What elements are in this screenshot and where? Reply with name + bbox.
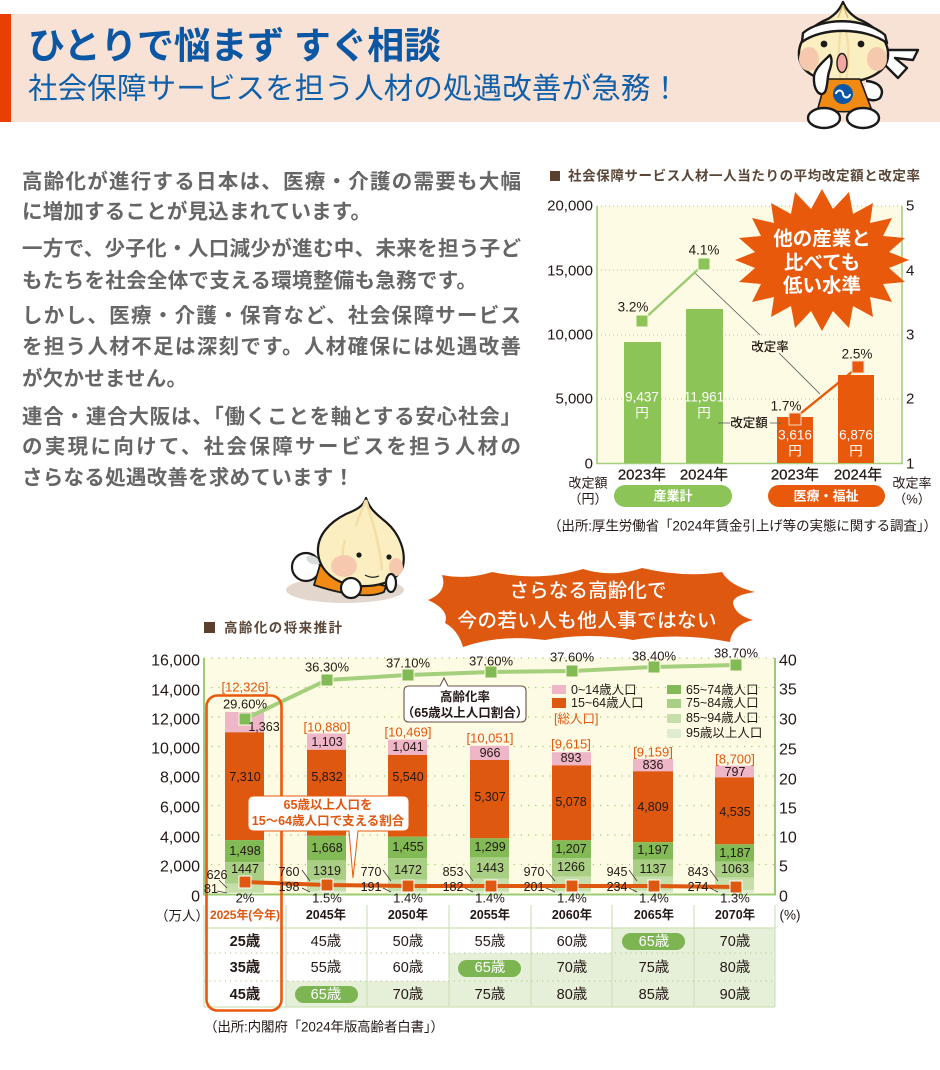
callout: aging is not someone else's problem: さらなる高齢化で [510, 580, 666, 602]
right axis: 35 [779, 682, 797, 698]
left axis: 0 [191, 888, 200, 906]
data labels: 274 [688, 880, 708, 894]
table cells: 45歳 [311, 933, 341, 950]
table cells: 60歳 [393, 959, 423, 976]
aging rate labels [223, 646, 758, 712]
text block: intro paragraphs: に増加することが見込まれています。 [22, 200, 371, 224]
totals: [9,159] [633, 744, 673, 760]
table cells: 80歳 [557, 986, 587, 1003]
aging rate labels: 37.10% [386, 656, 430, 670]
bar: 2065 [633, 759, 673, 894]
support ratio labels: 1.4% [475, 890, 505, 906]
support ratio labels: 1.4% [557, 890, 587, 906]
category pill: industry total: 産業計 [653, 488, 693, 504]
left axis labels [547, 198, 593, 472]
left axis: 2,000 [160, 858, 200, 876]
data labels: 1,187 [719, 846, 751, 860]
data labels: 760 [279, 865, 299, 879]
table cells: 85歳 [639, 986, 669, 1003]
data labels: 843 [688, 865, 708, 879]
legend: 95歳以上人口 [686, 726, 762, 740]
value labels: 円 [788, 444, 802, 458]
callout: aging rate: 高齢化率 [440, 689, 490, 704]
data labels: 1137 [640, 862, 666, 876]
legend: 65~74歳人口 [686, 683, 759, 697]
data labels: 1447 [231, 862, 259, 876]
totals: [10,880] [304, 720, 350, 734]
left axis labels: 20,000 [547, 198, 593, 214]
right axis labels [906, 198, 914, 472]
data labels: 5,832 [311, 770, 343, 784]
line: support ratio [239, 876, 742, 893]
category pill: medical and welfare [768, 485, 885, 507]
table cells: 75歳 [475, 986, 505, 1003]
table cells: 25歳 [230, 933, 261, 950]
data labels: 198 [279, 880, 299, 894]
data labels: 5,078 [555, 795, 587, 809]
data labels: 5,307 [474, 790, 506, 804]
table header: 2050年 [388, 907, 428, 922]
callout: aging is not someone else's problem [428, 568, 755, 647]
data labels: 191 [361, 880, 381, 894]
text block: intro paragraphs: さらなる処遇改善を求めています！ [22, 466, 354, 490]
category pill: medical and welfare: 医療・福祉 [793, 488, 859, 504]
data labels: 797 [725, 765, 745, 779]
heading: wage revision chart: 社会保障サービス人材一人当たりの平均改定額と改定率 [568, 168, 920, 184]
support ratio labels: 1.4% [393, 890, 423, 906]
right axis: 25 [779, 742, 797, 758]
value labels: 4.1% [689, 242, 719, 258]
data labels: 4,809 [637, 800, 669, 814]
text block: intro paragraphs: 高齢化が進行する日本は、医療・介護の需要も大幅 [22, 170, 521, 194]
x axis labels: 改定額 [568, 476, 608, 490]
data labels: 1319 [313, 864, 341, 878]
data labels: 1,207 [555, 842, 587, 856]
right axis [779, 652, 800, 922]
data labels: 770 [361, 865, 381, 879]
table cells: 55歳 [311, 959, 341, 976]
value labels: 円 [849, 444, 863, 458]
legend: 85~94歳人口 [686, 711, 759, 725]
left axis: 6,000 [160, 800, 200, 816]
totals: [10,469] [384, 724, 432, 740]
data labels: 7,310 [229, 770, 261, 784]
value labels: 改定額 [730, 415, 768, 430]
right axis labels: 4 [906, 262, 914, 280]
support ratio labels: 2% [236, 890, 255, 906]
table header: 2070年 [715, 907, 755, 922]
table header: 2025年(今年) [210, 907, 280, 922]
table cells: 35歳 [230, 959, 261, 976]
callout: starburst low level: 低い水準 [783, 275, 861, 297]
data labels: 966 [480, 746, 500, 760]
totals: [12,326] [222, 680, 268, 694]
left axis labels: 15,000 [547, 262, 593, 280]
data labels: 5,540 [392, 770, 424, 784]
value labels: 円 [697, 406, 711, 420]
totals [222, 680, 755, 766]
legend [552, 683, 762, 740]
table cells: 80歳 [720, 959, 750, 976]
left axis labels: 10,000 [547, 326, 593, 344]
table cells [230, 933, 750, 1003]
aging rate labels: 29.60% [223, 696, 267, 712]
left axis labels: 5,000 [555, 390, 593, 408]
callout: aging is not someone else's problem: 今の若い人も他人事ではない [458, 610, 716, 632]
leader lines [695, 273, 820, 423]
legend: [総人口] [554, 711, 598, 726]
source: top chart: （出所:厚生労働省「2024年賃金引上げ等の実態に関する調査」） [548, 518, 937, 534]
support ratio labels: 1.3% [720, 890, 750, 906]
right axis: 0 [779, 888, 788, 906]
data labels: 945 [607, 865, 627, 879]
rate lines [636, 258, 864, 425]
support ratio labels [236, 890, 750, 906]
support ratio labels: 1.4% [639, 890, 669, 906]
x axis labels: 2024年 [834, 466, 882, 484]
icon: onion mascot with headband [799, 2, 918, 128]
data labels: 970 [524, 865, 544, 879]
data labels: 4,535 [719, 805, 751, 819]
totals: [9,615] [551, 736, 591, 752]
right axis: 10 [779, 830, 797, 846]
text block: intro paragraphs: しかし、医療・介護・保育など、社会保障サービス [22, 304, 521, 328]
x axis labels: 2023年 [771, 466, 819, 484]
icon: lying onion mascot [286, 498, 404, 603]
value labels [618, 242, 873, 458]
highlight frame: 2025 column [206, 696, 282, 1010]
right axis: 15 [779, 800, 797, 818]
data labels: 1,041 [392, 740, 424, 754]
data labels: 853 [443, 865, 463, 879]
left axis: （万人） [155, 908, 209, 924]
data labels: 1,498 [229, 844, 261, 858]
left axis: 12,000 [151, 712, 200, 728]
left axis: 8,000 [160, 770, 200, 786]
value labels: 円 [635, 406, 649, 420]
text block: intro paragraphs: 連合・連合大阪は、「働くことを軸とする安心社会」 [22, 404, 521, 428]
table cells: 70歳 [393, 986, 423, 1003]
table header: 2045年 [306, 907, 346, 922]
data labels: 1,668 [311, 841, 343, 855]
callout: support ratio: 65歳以上人口を [284, 798, 372, 812]
table cells: 55歳 [475, 933, 505, 950]
value labels: 9,437 [625, 390, 659, 404]
totals: [8,700] [715, 752, 755, 766]
left axis labels: 0 [585, 456, 593, 472]
table cells: 70歳 [720, 933, 750, 950]
right axis: (%) [780, 908, 800, 922]
title: ひとりで悩まず すぐ相談 [28, 26, 441, 66]
leader lines for small segments [217, 870, 718, 893]
value labels: 1.7% [771, 398, 801, 414]
left axis: 4,000 [160, 830, 200, 846]
value labels: 11,961 [684, 390, 724, 404]
data labels: 234 [607, 880, 627, 894]
text block: intro paragraphs: を担う人材不足は深刻です。人材確保には処遇改善 [22, 336, 521, 358]
value labels: 3,616 [778, 428, 812, 442]
data labels: 836 [643, 758, 663, 772]
table cells: 75歳 [639, 959, 669, 976]
callout: support ratio [248, 796, 409, 878]
x axis labels: （%） [893, 492, 931, 506]
value labels: 3.2% [618, 300, 648, 314]
table header: 2055年 [470, 907, 510, 922]
legend: 15~64歳人口 [571, 696, 644, 710]
left axis [151, 652, 209, 924]
right axis: 40 [779, 652, 797, 670]
table cells: 60歳 [557, 933, 587, 950]
right axis labels: 1 [906, 456, 914, 472]
right axis: 30 [779, 712, 797, 728]
table cells: 65歳 [475, 959, 505, 976]
bar: 2060 [552, 752, 591, 894]
legend: 75~84歳人口 [686, 696, 759, 710]
panel: title banner [0, 14, 940, 122]
right axis labels: 3 [906, 326, 914, 344]
left axis: 10,000 [151, 740, 200, 758]
left axis: 14,000 [151, 682, 200, 700]
left axis: 16,000 [151, 652, 200, 670]
x axis labels: 2023年 [618, 466, 666, 484]
callout: starburst low level: 他の産業と [773, 228, 871, 250]
right axis labels: 2 [906, 390, 914, 408]
x axis labels: （円） [568, 492, 608, 506]
subtitle: 社会保障サービスを担う人材の処遇改善が急務！ [28, 72, 680, 106]
line: aging rate [239, 659, 742, 725]
data labels: 1,299 [474, 840, 506, 854]
right axis: 20 [779, 772, 797, 788]
text block: intro paragraphs [22, 170, 522, 490]
aging rate labels: 37.60% [469, 654, 513, 668]
data labels: 893 [561, 751, 581, 765]
data labels: 1063 [721, 862, 749, 876]
table header [210, 907, 755, 922]
text block: intro paragraphs: が欠かせません。 [22, 366, 187, 390]
right axis labels: 5 [906, 198, 914, 214]
bar: 2050 [388, 740, 427, 894]
callout: aging rate: （65歳以上人口割合） [402, 705, 528, 720]
data labels: 1,197 [637, 843, 669, 857]
bar: 2025 [225, 712, 264, 894]
data labels: 81 [204, 882, 218, 896]
data labels: 626 [207, 868, 227, 882]
table header: 2065年 [634, 907, 674, 922]
highlight pills [295, 933, 685, 1003]
table header: 2060年 [552, 907, 592, 922]
callout: aging rate [402, 678, 528, 722]
value labels: 2.5% [842, 346, 872, 362]
table cells: 65歳 [311, 986, 341, 1003]
x axis labels: 2024年 [680, 466, 728, 484]
callout: starburst low level: 比べても [784, 252, 860, 274]
data labels: 182 [443, 880, 463, 894]
bars [624, 309, 874, 463]
x axis labels [568, 466, 932, 506]
table cells: 50歳 [393, 933, 423, 950]
chart: average revision amount and rate [547, 198, 932, 507]
bar: 2045 [307, 734, 346, 894]
aging rate labels: 37.60% [550, 650, 594, 664]
source: bottom chart: （出所:内閣府「2024年版高齢者白書」） [204, 1018, 444, 1034]
value labels: 改定率 [751, 339, 789, 354]
data labels: 201 [524, 880, 544, 894]
category pill: industry total [614, 485, 732, 507]
legend: 0~14歳人口 [571, 683, 637, 697]
support ratio labels: 1.5% [312, 890, 342, 906]
table cells: 65歳 [639, 933, 669, 950]
text block: intro paragraphs: の実現に向けて、社会保障サービスを担う人材の [22, 436, 521, 458]
chart: population projection [151, 646, 800, 924]
callout: support ratio: 15～64歳人口で支える割合 [252, 813, 405, 828]
x axis labels: 改定率 [892, 476, 932, 490]
text block: intro paragraphs: 一方で、少子化・人口減少が進む中、未来を担う子ど [22, 236, 522, 260]
data labels: 1,363 [248, 720, 280, 734]
table: age by year [204, 905, 775, 1007]
data labels: 1266 [557, 860, 585, 874]
aging rate labels: 38.40% [632, 648, 676, 664]
totals: [10,051] [466, 730, 514, 746]
aging rate labels: 36.30% [305, 660, 349, 674]
bar: 2055 [470, 746, 509, 894]
table cells: 90歳 [720, 986, 750, 1003]
callout: starburst low level [735, 189, 909, 331]
data labels: 1472 [394, 863, 422, 877]
table cells: 70歳 [557, 959, 587, 976]
data labels: 1443 [476, 861, 504, 875]
table cells: 45歳 [230, 986, 261, 1003]
data labels: 1,103 [311, 735, 343, 749]
data labels: 1,455 [392, 840, 424, 854]
right axis: 5 [779, 858, 788, 876]
bar: 2070 [715, 766, 754, 894]
data labels [204, 720, 751, 896]
value labels: 6,876 [839, 428, 873, 442]
text block: intro paragraphs: もたちを社会全体で支える環境整備も急務です。 [22, 270, 477, 292]
heading: aging projection: 高齢化の将来推計 [224, 620, 342, 636]
aging rate labels: 38.70% [714, 646, 758, 660]
